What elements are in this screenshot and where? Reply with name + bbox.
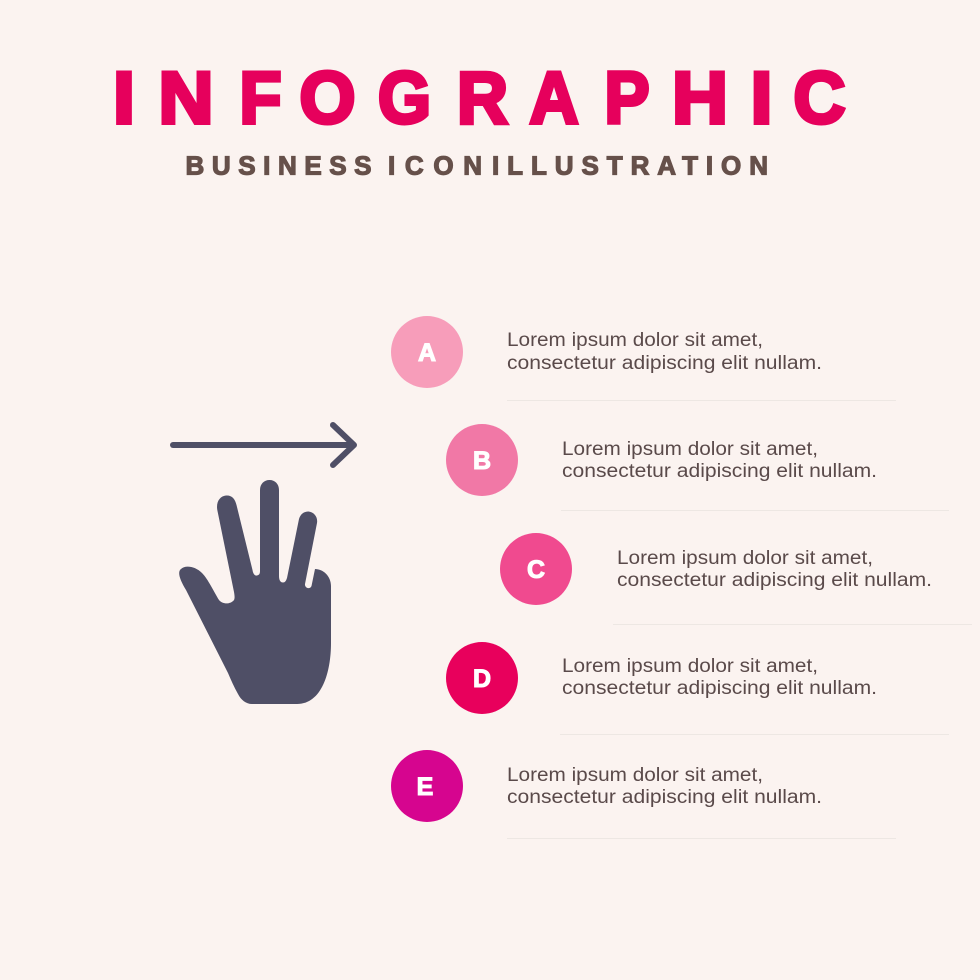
list item B [446,424,949,511]
list item A [391,316,896,401]
list item C [500,533,972,625]
text block D: consectetur adipiscing elit nullam. [562,678,877,699]
title: I [750,58,772,139]
badge D [446,642,518,714]
title: A [530,58,578,139]
title: G [378,58,431,139]
badge A: A [418,339,436,367]
title: P [604,58,650,139]
text block B [562,439,877,482]
badge B [446,424,518,496]
badge C: C [527,556,545,584]
text block E: consectetur adipiscing elit nullam. [507,787,822,808]
badge E: E [417,773,433,801]
title: R [457,58,508,139]
badge C [500,533,572,605]
badge D: D [473,665,491,693]
title: C [794,58,846,139]
title: N [158,58,214,139]
title [113,58,846,139]
text block D [562,656,877,699]
text block E [507,765,822,808]
subtitle: ILLUSTRATION [492,150,768,180]
text block B: Lorem ipsum dolor sit amet, [562,439,818,460]
text block A: consectetur adipiscing elit nullam. [507,353,822,374]
text block E: Lorem ipsum dolor sit amet, [507,765,763,786]
text block D: Lorem ipsum dolor sit amet, [562,656,818,677]
title: O [300,58,356,139]
list item E [391,750,896,839]
title: H [672,58,728,139]
icon: arrow pointing right [173,425,354,465]
badge B: B [473,447,491,475]
badge E [391,750,463,822]
text block B: consectetur adipiscing elit nullam. [562,461,877,482]
text block C: consectetur adipiscing elit nullam. [617,570,932,591]
text block A: Lorem ipsum dolor sit amet, [507,330,763,351]
subtitle: BUSINESS [186,150,372,180]
subtitle: ICON [388,150,482,180]
badge A [391,316,463,388]
text block A [507,330,822,374]
text block C [617,548,932,591]
list item D [446,642,949,735]
title: I [113,58,135,139]
text block C: Lorem ipsum dolor sit amet, [617,548,873,569]
title: F [240,58,282,139]
subtitle [186,150,768,180]
icon: three-finger hand [179,480,331,704]
